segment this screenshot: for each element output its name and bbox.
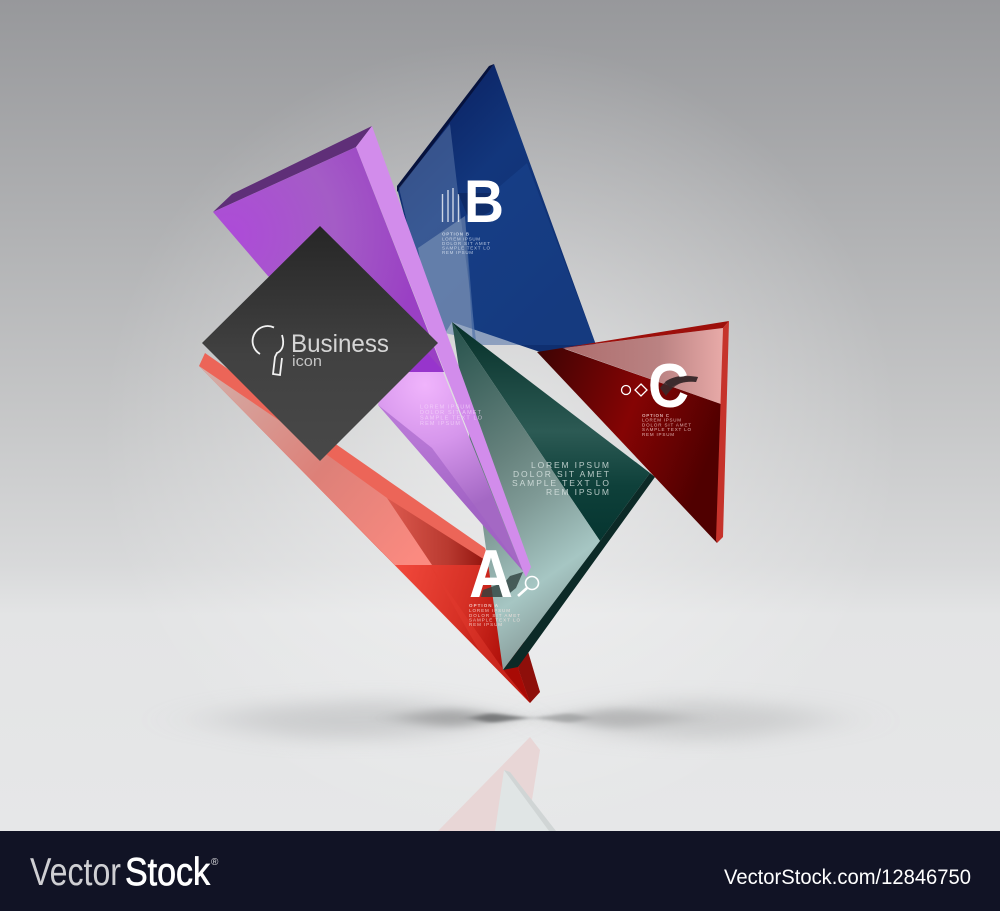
text block B: OPTION B: [442, 232, 470, 236]
text block C: LOREM IPSUM: [642, 418, 681, 423]
text block C: [642, 413, 691, 437]
logo: VectorStock: Vector: [30, 851, 121, 894]
icon: bars: [442, 188, 458, 222]
text block C: SAMPLE TEXT LO: [642, 427, 691, 432]
letter A: A: [469, 536, 513, 612]
text: lorem on green: LOREM IPSUM: [531, 460, 609, 470]
option A label: [469, 536, 538, 627]
footer bar: [0, 831, 1000, 911]
text block B: [442, 232, 490, 255]
floor reflection: [438, 737, 556, 831]
icon: circle and diamond: [622, 384, 647, 396]
icon: key bulb: [253, 326, 283, 375]
text: lorem on green: SAMPLE TEXT LO: [512, 478, 609, 488]
text: lorem on purple: SAMPLE TEXT LO: [420, 416, 483, 422]
panel: green triangle: [452, 322, 655, 670]
floor shadow: [200, 698, 840, 742]
icon: magnifier: [518, 576, 538, 596]
text block B: REM IPSUM: [442, 250, 473, 255]
text block B: SAMPLE TEXT LO: [442, 246, 490, 250]
text block A: SAMPLE TEXT LO: [469, 618, 520, 622]
panel: red triangle A: [199, 353, 540, 703]
text: lorem on purple: DOLOR SIT AMET: [420, 410, 482, 416]
text block B: DOLOR SIT AMET: [442, 241, 490, 246]
text block A: [469, 603, 520, 627]
letter C: C: [648, 352, 689, 421]
text: lorem on green: DOLOR SIT AMET: [513, 469, 609, 479]
letter B: B: [464, 168, 504, 235]
text: lorem on purple: [420, 404, 483, 427]
option B label: [442, 168, 504, 255]
text block C: OPTION C: [642, 413, 670, 418]
text block A: OPTION A: [469, 603, 499, 608]
panel: red triangle C: [537, 321, 729, 543]
panel: purple triangle: [213, 126, 531, 577]
panel: black square with Business icon: [202, 226, 438, 461]
text block A: REM IPSUM: [469, 622, 502, 627]
text block B: LOREM IPSUM: [442, 236, 480, 242]
panel: blue triangle B: [397, 64, 596, 352]
text: lorem on purple: LOREM IPSUM: [420, 404, 470, 410]
text block C: DOLOR SIT AMET: [642, 422, 691, 428]
text block A: DOLOR SIT AMET: [469, 613, 520, 618]
text: lorem on purple: REM IPSUM: [420, 421, 460, 427]
heading: Business: Business: [291, 330, 389, 358]
text: lorem on green: [512, 460, 609, 497]
text block C: REM IPSUM: [642, 432, 674, 437]
subheading: icon: icon: [292, 353, 322, 370]
registered mark: ®: [211, 857, 219, 868]
option C label: [622, 352, 698, 437]
text: lorem on green: REM IPSUM: [546, 487, 609, 497]
logo: VectorStock: Stock: [125, 851, 210, 894]
image id: VectorStock.com/12846750: [724, 866, 971, 889]
text block A: LOREM IPSUM: [469, 608, 510, 613]
